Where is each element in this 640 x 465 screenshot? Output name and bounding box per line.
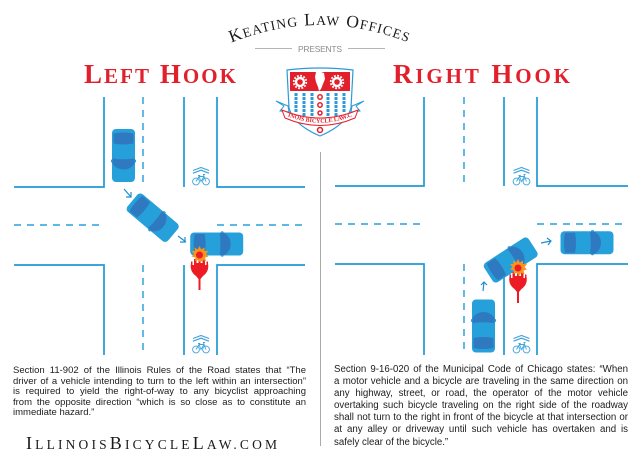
car: heading east: [190, 231, 243, 257]
text block: right hook law: at any alley or driveway until such vehicle has overtaken and is: [334, 424, 628, 435]
car: heading east: [560, 230, 614, 255]
text block: left hook law: [13, 365, 306, 418]
road edges: [14, 97, 305, 355]
footer: website: ILLINOISBICYCLELAW.COM: [26, 433, 277, 453]
text block: left hook law: immediate hazard.”: [13, 407, 94, 418]
text block: left hook law: driver of a vehicle intending to turn to the left within an intersection”: [13, 376, 306, 387]
car: turning right: [482, 235, 540, 285]
car: heading north: [471, 300, 496, 352]
text block: left hook law: from the opposite direction “which is so close as to constitute an: [13, 397, 306, 408]
divider: [320, 152, 321, 446]
panel: right hook intersection: [335, 97, 628, 355]
text block: right hook law: safely clear of the bicycle.”: [334, 437, 448, 448]
icon: bicycle crash: [509, 259, 527, 303]
arrow: second turn: [541, 238, 551, 245]
car: turning left: [124, 191, 181, 244]
arrow: first turn: [124, 189, 131, 197]
icon: bike lane bottom: [513, 336, 530, 353]
text block: right hook law: overtaking such bicycle traveling on the right side of the roadway: [334, 400, 628, 411]
text block: right hook law: shall not turn to the right in front of the bicycle at that intersection or: [334, 412, 628, 423]
text block: right hook law: a motor vehicle and a bicycle are traveling in the same direction on: [334, 376, 628, 387]
text block: right hook law: Section 9-16-020 of the Municipal Code of Chicago states: “When: [334, 364, 628, 375]
road edges: [335, 97, 628, 355]
car: heading south: [111, 129, 136, 182]
title: Right Hook: RIGHT HOOK: [393, 59, 571, 89]
logo: Illinois Bicycle Law shield: [276, 67, 364, 137]
subheading: presents: [255, 44, 385, 54]
icon: bike lane bottom: [193, 336, 209, 353]
arrow: second turn: [178, 236, 186, 242]
text block: right hook law: any highway, street, or road, the operator of the motor vehicle: [334, 388, 628, 399]
text block: left hook law: is required to yield the right-of-way to any bicyclist approaching: [13, 386, 306, 397]
arrow: first turn: [481, 282, 487, 291]
text block: right hook law: [334, 364, 628, 448]
subheading: presents: PRESENTS: [298, 44, 342, 54]
icon: bike lane top: [193, 168, 209, 185]
heading: Keating Law Offices: KEATING LAW OFFICES: [228, 14, 410, 42]
title: Left Hook: LEFT HOOK: [84, 59, 237, 89]
text block: left hook law: Section 11-902 of the Illinois Rules of the Road states that “The: [13, 365, 306, 376]
icon: bicycle crash: [191, 246, 208, 290]
panel: left hook intersection: [14, 97, 305, 355]
icon: bike lane top: [513, 168, 530, 185]
